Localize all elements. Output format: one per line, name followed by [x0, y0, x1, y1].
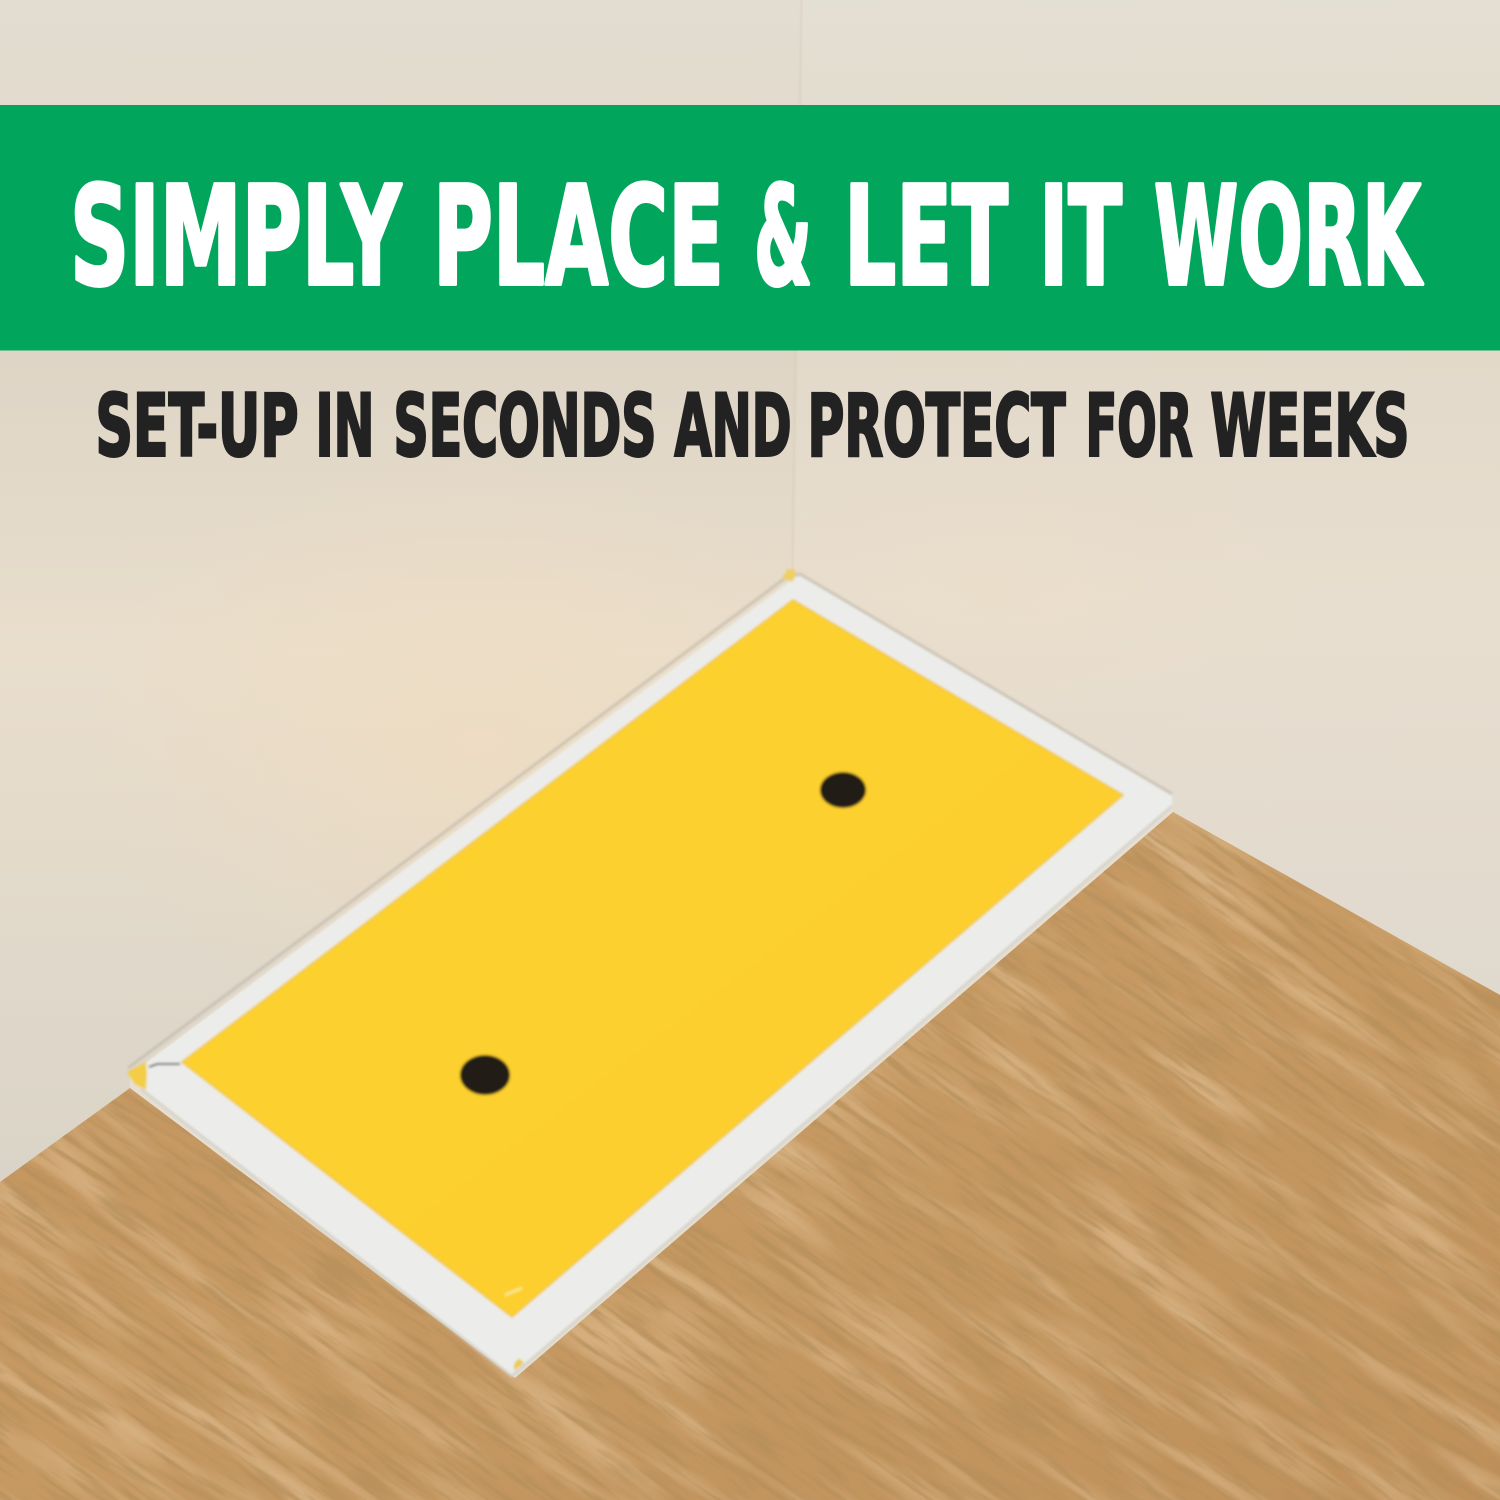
title: LET	[844, 158, 1008, 317]
subtitle: SECONDS	[394, 376, 656, 476]
title	[70, 158, 1424, 317]
wooden floor	[0, 812, 1500, 1500]
subtitle: PROTECT	[808, 376, 1066, 476]
photo background: left wall	[0, 0, 803, 1182]
trap: yellow corner edges	[127, 1062, 147, 1090]
trap: lower black dot	[460, 1055, 510, 1095]
title: IT	[1039, 158, 1122, 317]
subtitle	[96, 376, 1410, 476]
photo background: right wall	[793, 0, 1500, 995]
subtitle: FOR	[1086, 376, 1192, 476]
warm light on walls	[80, 420, 1300, 1040]
subtitle: SET-UP	[96, 376, 298, 476]
trap: white card border	[141, 576, 1172, 1376]
trap: glue board	[182, 600, 1123, 1317]
trap: glare on glue	[505, 1288, 522, 1295]
trap: outer grey edge	[141, 806, 1172, 1376]
trap: black tick mark	[149, 1064, 180, 1067]
trap: upper black dot	[820, 772, 866, 808]
wall corner shading	[792, 0, 802, 572]
subtitle: AND	[674, 376, 792, 476]
title: SIMPLY	[70, 158, 402, 317]
green banner	[0, 105, 1500, 350]
title: PLACE	[433, 158, 724, 317]
subtitle: IN	[316, 376, 374, 476]
title: &	[754, 158, 812, 317]
trap: wall shadow lines	[128, 574, 1172, 1068]
sticky trap	[127, 569, 1172, 1376]
